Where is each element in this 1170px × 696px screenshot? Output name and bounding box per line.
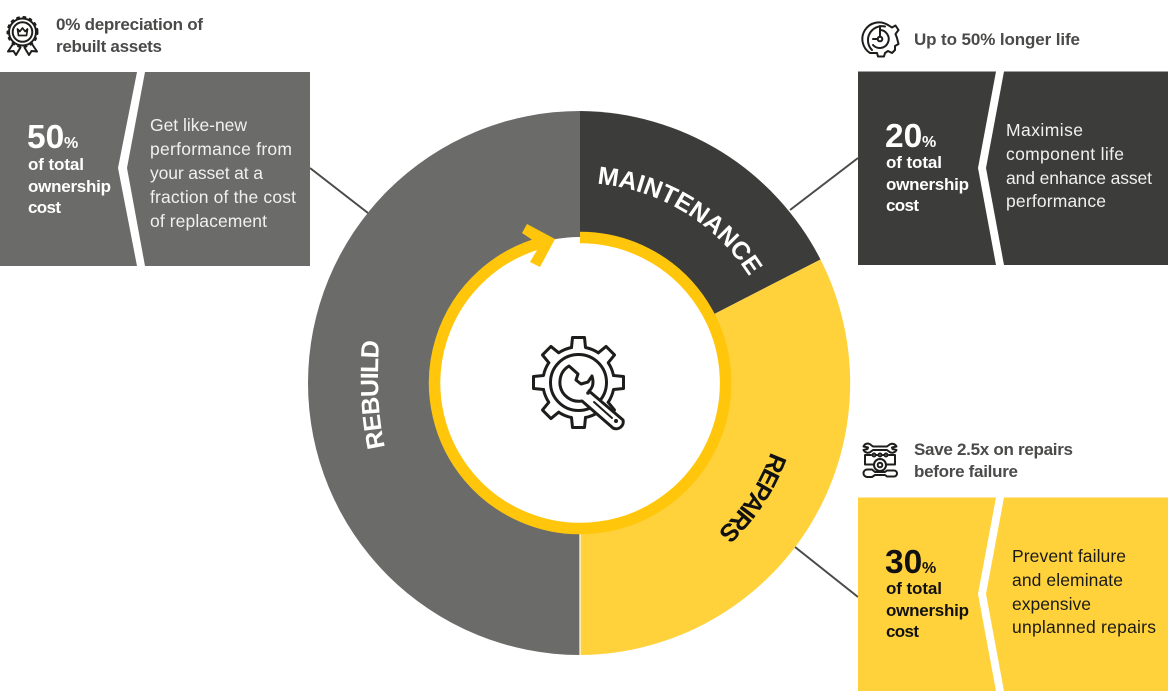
icon: gear and wrench	[533, 337, 624, 429]
connector lines	[310, 158, 858, 597]
figure: 30%: %	[922, 560, 936, 577]
cost label: cost	[886, 196, 919, 215]
description text: Get like-new	[150, 115, 247, 135]
callout: maintenance	[858, 22, 1168, 265]
description text: expensive	[1012, 594, 1091, 614]
description text: fraction of the cost	[150, 187, 296, 207]
callout: repairs	[858, 440, 1168, 691]
benefit heading: rebuilt assets	[56, 37, 162, 56]
donut hole	[434, 237, 726, 529]
description text: and enhance asset	[1006, 168, 1152, 188]
cost label: of total	[886, 579, 942, 598]
cost label: of total	[28, 155, 84, 174]
figure: 50%: %	[64, 135, 78, 152]
description text: unplanned repairs	[1012, 617, 1156, 637]
description text: performance from	[150, 139, 292, 159]
label: repairs: REPAIRS	[720, 453, 786, 542]
panel: description	[986, 72, 1168, 265]
label: rebuild: REBUILD	[360, 341, 384, 449]
description text: performance	[1006, 191, 1106, 211]
figure: 50%: 50	[27, 119, 64, 156]
segment: rebuild	[308, 111, 580, 655]
cost label: of total	[886, 153, 942, 172]
icon: medal	[8, 17, 38, 55]
description text: Maximise	[1006, 120, 1083, 140]
cost label: cost	[886, 622, 919, 641]
panel: cost share	[0, 72, 137, 266]
figure: 20%: %	[922, 134, 936, 151]
description text: component life	[1006, 144, 1124, 164]
cost label: ownership	[28, 177, 111, 196]
callout: rebuild	[0, 15, 310, 266]
benefit heading: Up to 50% longer life	[914, 30, 1080, 49]
cost label: ownership	[886, 175, 969, 194]
segment divider	[579, 530, 581, 655]
icon: tools	[863, 443, 897, 477]
donut chart	[308, 111, 850, 655]
description text: of replacement	[150, 211, 267, 231]
cost label: cost	[28, 198, 61, 217]
benefit heading: before failure	[914, 462, 1018, 481]
circular arrow	[435, 224, 726, 528]
benefit heading: 0% depreciation of	[56, 15, 203, 34]
segment: repairs	[580, 260, 850, 655]
icon: clock gear	[862, 22, 898, 57]
figure: 20%: 20	[885, 118, 922, 155]
segment: maintenance	[580, 111, 820, 383]
benefit heading: Save 2.5x on repairs	[914, 440, 1073, 459]
cost label: ownership	[886, 601, 969, 620]
panel: cost share	[858, 72, 996, 265]
panel: description	[986, 498, 1168, 691]
description text: Prevent failure	[1012, 546, 1126, 566]
panel: cost share	[858, 498, 996, 691]
figure: 30%: 30	[885, 544, 922, 581]
label: maintenance: MAINTENANCE	[598, 166, 763, 276]
description text: and eleminate	[1012, 570, 1123, 590]
panel: description	[127, 72, 310, 266]
description text: your asset at a	[150, 163, 263, 183]
